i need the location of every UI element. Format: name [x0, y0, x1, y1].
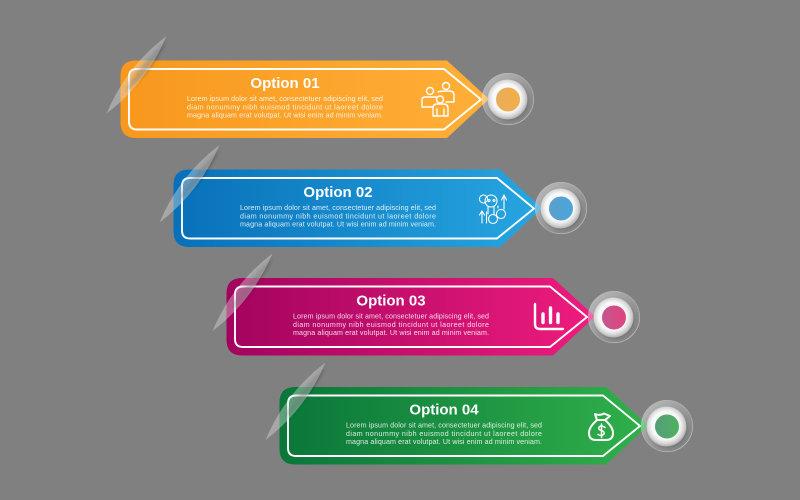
panel: option 02	[160, 145, 587, 247]
panel: option 03	[212, 254, 640, 356]
title: Option 03	[356, 292, 426, 310]
icon: money bag	[589, 414, 613, 440]
body text: Lorem ipsum dolor sit amet, consectetuer adipiscing elit, sed	[346, 422, 542, 430]
body text: magna aliquam erat volutpat. Ut wisi enim ad minim veniam.	[240, 220, 436, 228]
indicator lens	[588, 291, 640, 343]
inner outline	[129, 69, 481, 130]
arrow banner	[174, 170, 542, 247]
icon: growth gears	[480, 195, 506, 224]
title: Option 02	[303, 184, 373, 201]
inner outline	[288, 396, 640, 456]
body text: diam nonummy nibh euismod tincidunt ut laoreet dolore	[293, 321, 489, 329]
inner outline	[182, 178, 534, 238]
indicator lens	[641, 400, 693, 452]
glare	[160, 145, 220, 222]
glare	[106, 36, 166, 114]
arrow banner	[226, 278, 595, 356]
title: Option 01	[250, 75, 320, 92]
body text: diam nonummy nibh euismod tincidunt ut laoreet dolore	[187, 104, 383, 112]
body text: magna aliquam erat volutpat. Ut wisi enim ad minim veniam.	[187, 112, 383, 120]
inner outline	[235, 286, 587, 347]
title: Option 04	[409, 402, 479, 418]
body text: diam nonummy nibh euismod tincidunt ut laoreet dolore	[240, 212, 436, 220]
body text: diam nonummy nibh euismod tincidunt ut laoreet dolore	[346, 430, 542, 438]
icon: people	[422, 82, 454, 116]
indicator lens	[535, 182, 587, 234]
icon: bar chart	[535, 304, 563, 329]
panel: option 01	[106, 36, 534, 138]
body text: magna aliquam erat volutpat. Ut wisi enim ad minim veniam.	[293, 329, 489, 337]
body text: Lorem ipsum dolor sit amet, consectetuer adipiscing elit, sed	[187, 95, 383, 103]
body text: magna aliquam erat volutpat. Ut wisi enim ad minim veniam.	[346, 438, 542, 446]
arrow banner	[120, 60, 489, 138]
body text: Lorem ipsum dolor sit amet, consectetuer adipiscing elit, sed	[240, 204, 436, 212]
glare	[266, 362, 326, 440]
glare	[212, 254, 272, 331]
arrow banner	[280, 387, 648, 464]
indicator lens	[482, 73, 534, 125]
body text: Lorem ipsum dolor sit amet, consectetuer adipiscing elit, sed	[293, 312, 489, 320]
panel: option 04	[266, 362, 693, 464]
